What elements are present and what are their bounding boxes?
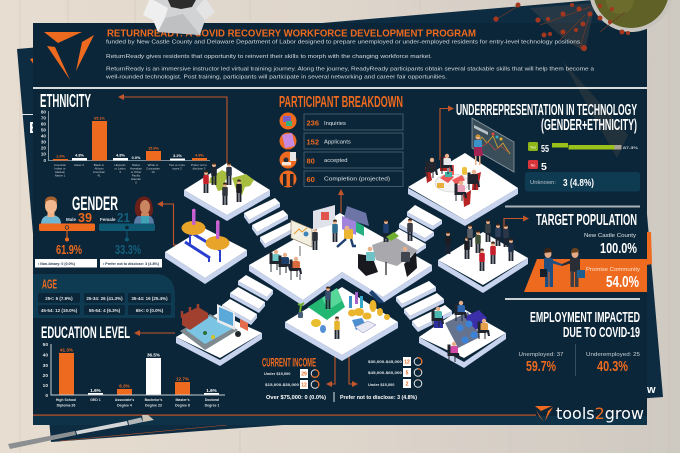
platform: meeting with chart board — [408, 118, 518, 226]
ethnicity bar chart: Hispanic — [114, 163, 126, 167]
underrepresentation stats: 5 — [541, 161, 547, 173]
participant breakdown list: 80 — [306, 156, 315, 166]
intro paragraph — [105, 40, 595, 80]
platform: gender scales — [165, 209, 247, 284]
current income panel: Under $15,000 — [368, 382, 394, 387]
current income panel: 29 — [301, 372, 307, 378]
gender panel — [35, 194, 162, 268]
ethnicity bar chart: 4.8% — [116, 154, 125, 158]
arrow: gender — [157, 201, 182, 245]
ethnicity bar chart: or Other — [131, 170, 141, 174]
gender heading: GENDER — [72, 194, 118, 215]
icon: inquiries — [280, 112, 296, 130]
ethnicity bar chart: disclose 3 — [193, 166, 206, 170]
arrow: ethnicity — [118, 94, 227, 165]
education bar chart: Degree 8 — [175, 404, 190, 408]
ethnicity bar chart: 0 — [43, 158, 46, 163]
current income panel: 12 — [301, 382, 307, 388]
education heading: EDUCATION LEVEL — [41, 324, 130, 342]
employment stats: 40.3% — [597, 358, 628, 375]
decoration: craft knife — [8, 415, 154, 449]
current income panel: Over $75,000: 0 (0.0%) — [266, 395, 326, 401]
current income panel: 5 — [406, 370, 409, 376]
panel: age: 25-34: 26 (41.3%) — [86, 296, 123, 301]
panel: age: 55-64: 4 (6.3%) — [89, 308, 121, 313]
arrow: education — [134, 330, 175, 336]
gender panel: • Prefer not to disclose: 3 (4.8%) — [103, 262, 160, 266]
participant breakdown list — [280, 112, 403, 188]
target population panel: Promise Community — [586, 267, 640, 273]
current income panel: $30,000-$45,000 — [368, 359, 402, 364]
footer logo: tools2grow: tools2grow — [556, 404, 644, 423]
education bar chart: 41.3% — [60, 348, 73, 352]
ethnicity bar chart: 3.2% — [173, 154, 182, 158]
employment stats: Unemployed: 37 — [518, 352, 564, 358]
arrow: income right — [349, 353, 358, 387]
employment stats: 59.7% — [526, 358, 556, 375]
icon: completion — [280, 170, 296, 188]
intro paragraph: ReturnReady is an immersive instructor led virtual training journey. Along the journey, ReadyReady participants obtain several stackable skills that will help them become a — [106, 66, 595, 72]
education bar chart: Diploma 26 — [57, 404, 75, 408]
underrepresentation stats: Yes — [530, 146, 536, 150]
arrow: participant — [338, 189, 344, 213]
participant breakdown heading: PARTICIPANT BREAKDOWN — [279, 94, 403, 111]
panel: age: 45-54: 12 (19.0%) — [41, 308, 78, 313]
decoration: white faceted vase — [143, 0, 215, 35]
target population panel: 100.0% — [600, 240, 637, 257]
education bar chart: 1.6% — [90, 388, 101, 393]
ethnicity bar chart: African — [94, 166, 104, 170]
participant breakdown list: 236 — [306, 118, 319, 128]
education bar chart: Master's — [175, 398, 190, 402]
education bar chart: 30 — [43, 363, 48, 369]
ethnicity bar chart: 4.8% — [75, 154, 84, 158]
education bar chart: Bachelor's — [145, 398, 162, 402]
gender panel: Female — [100, 217, 116, 222]
arrow: target population — [504, 216, 529, 232]
current income panel: $15,000-$30,000 — [265, 382, 299, 387]
audience seats — [270, 250, 302, 280]
panel: age — [33, 274, 175, 318]
underrepresentation stats: 3 (4.8%) — [563, 177, 594, 189]
education bar chart: 12.7% — [176, 376, 189, 382]
ethnicity bar chart: or Latino — [114, 166, 126, 170]
underrepresentation stats: 55 — [541, 143, 549, 155]
ethnicity bar chart: 15.9% — [148, 146, 159, 150]
icon: accepted — [280, 152, 296, 168]
title: RETURNREADY: A COVID RECOVERY WORKFORCE DEVELOPMENT PROGRAM — [107, 28, 476, 40]
platform: education — [176, 304, 262, 366]
platform: central workspace — [249, 205, 432, 306]
ethnicity bar chart: Native — [132, 163, 140, 167]
target population panel: 54.0% — [606, 274, 639, 291]
intro paragraph: funded by New Castle County and Delaware Department of Labor designed to prepare unemployed or under-employed residents for entry-level technology positions. — [106, 40, 582, 46]
ethnicity bar chart: Indian or — [54, 166, 66, 170]
participant breakdown list: Completion (projected) — [324, 176, 390, 182]
current income panel: 12 — [404, 360, 410, 366]
arrow: underrepresentation — [440, 106, 454, 160]
decoration: plant bowl — [589, 0, 673, 32]
education bar chart: 36.5% — [147, 352, 160, 358]
participant breakdown list: 152 — [306, 138, 319, 146]
kneeling figure — [337, 226, 356, 247]
ethnicity bar chart: Caucasian — [146, 166, 160, 170]
icon: handshake businessmen — [540, 248, 585, 287]
ethnicity bar chart: 4.8% — [195, 154, 204, 158]
current income panel: Under $15,000 — [264, 371, 290, 376]
education bar chart: GED 1 — [90, 398, 101, 402]
header logo — [44, 32, 94, 80]
large screens — [313, 205, 335, 230]
employment stats — [518, 344, 640, 376]
education bar chart — [43, 342, 225, 408]
back sheet of poster: w — [646, 384, 656, 396]
ethnicity bar chart: Pacific — [132, 174, 141, 178]
intro paragraph: ReturnReady gives residents that opportunity to reinvent their skills to morph with the changing workforce market. — [106, 54, 432, 60]
decoration: red berry branches — [493, 2, 630, 51]
ethnicity bar chart: Hawaiian — [130, 166, 142, 170]
panel: age: 35-44: 16 (25.4%) — [131, 296, 168, 301]
platform: world map — [184, 162, 270, 221]
target population panel: New Castle County — [584, 233, 636, 239]
ethnicity bar chart: 30 — [41, 140, 46, 144]
participant breakdown list: accepted — [324, 158, 348, 164]
ethnicity bar chart: 40 — [41, 134, 46, 138]
participant breakdown list: 60 — [306, 175, 315, 184]
back sheet of poster: E — [29, 120, 40, 137]
ethnicity bar chart: White or — [148, 163, 158, 167]
participant breakdown list: Inquiries — [324, 121, 346, 127]
ethnicity bar chart: 0 — [135, 180, 137, 184]
underrepresentation stats: 87.3% — [623, 145, 639, 150]
ethnicity bar chart: Two or more — [169, 163, 185, 167]
education bar chart: Associate's — [115, 398, 134, 402]
whiteboard presenter — [291, 220, 318, 256]
education bar chart: 6.3% — [119, 384, 130, 388]
gender panel: 61.9% — [56, 242, 82, 257]
ethnicity bar chart: 3 — [119, 170, 121, 174]
underrepresentation stats: No — [531, 164, 535, 168]
ethnicity bar chart: Prefer not to — [191, 163, 207, 167]
ethnicity bar chart: 80 — [41, 110, 46, 114]
gender panel: 21 — [117, 210, 130, 225]
panel: age: 25<: 5 (7.9%) — [45, 296, 73, 301]
current income panel — [262, 357, 422, 402]
underrepresentation stats — [525, 142, 640, 192]
education bar chart: 20 — [43, 373, 48, 379]
ethnicity bar chart: 70 — [41, 116, 46, 120]
education bar chart: Degree 1 — [205, 404, 219, 408]
gender panel: 39 — [78, 210, 92, 225]
ethnicity bar chart: Alaskan — [55, 170, 66, 174]
current income panel: CURRENT INCOME — [262, 358, 316, 370]
icon: female avatar — [134, 196, 154, 224]
gender panel: • Non-binary: 0 (0.0%) — [38, 262, 76, 266]
panel: age: AGE — [42, 276, 57, 292]
platform: servers — [419, 301, 506, 368]
education bar chart: 40 — [43, 352, 48, 358]
ethnicity bar chart: 50 — [41, 128, 46, 132]
target population panel — [524, 233, 647, 292]
ethnicity bar chart: 20 — [41, 146, 46, 150]
ethnicity bar chart: American — [93, 170, 105, 174]
ethnicity bar chart: 1.6% — [56, 154, 65, 158]
education bar chart: Doctoral — [205, 398, 219, 402]
underrepresentation stats: Unknown: — [530, 180, 556, 186]
ethnicity bar chart: Native 1 — [55, 174, 66, 178]
ethnicity bar chart: 65.1% — [94, 116, 105, 120]
ethnicity bar chart: 41 — [97, 174, 101, 178]
education bar chart: Degree 4 — [117, 404, 132, 408]
icon: male avatar — [41, 196, 61, 224]
ethnicity bar chart: races 2 — [172, 166, 182, 170]
employment heading — [530, 309, 640, 341]
ethnicity bar chart: 10 — [41, 152, 46, 156]
arrow: income left — [326, 353, 335, 387]
ethnicity bar chart: Asian 3 — [74, 163, 84, 167]
education bar chart: 50 — [43, 342, 48, 348]
gender panel: 33.3% — [115, 242, 141, 257]
education bar chart: 1.6% — [206, 388, 217, 393]
platform: finance — [285, 286, 398, 361]
current income panel: 2 — [406, 382, 409, 388]
ethnicity bar chart: Black or — [94, 163, 104, 167]
education bar chart: High School — [56, 398, 76, 402]
ethnicity bar chart: 0.0% — [132, 156, 141, 160]
underrepresentation heading — [456, 102, 637, 134]
ethnicity bar chart: 10 — [151, 170, 155, 174]
ethnicity bar chart: Islander — [131, 177, 141, 181]
panel: age: 65<: 0 (0.0%) — [136, 308, 164, 313]
education bar chart: 0 — [45, 393, 48, 399]
meeting table — [372, 237, 418, 266]
ethnicity bar chart: American — [54, 163, 66, 167]
ethnicity bar chart: 60 — [41, 122, 46, 126]
education bar chart: Degree 23 — [145, 404, 162, 408]
education bar chart: 10 — [43, 383, 48, 389]
platform: target population crowd — [438, 220, 528, 293]
icon: applicants — [280, 132, 296, 150]
intro paragraph: well-rounded technologist. Post training, participants will participate in several networking and career fair opportunities. — [105, 74, 447, 80]
current income panel: Prefer not to disclose: 3 (4.8%) — [340, 395, 417, 401]
employment stats: Underemployed: 25 — [586, 352, 640, 358]
stairs — [222, 198, 452, 332]
gender panel: Male — [66, 217, 77, 222]
participant breakdown list: Applicants — [324, 140, 351, 146]
current income panel: $45,000-$60,000 — [368, 370, 402, 375]
ethnicity bar chart — [41, 110, 210, 184]
ethnicity heading: ETHNICITY — [40, 91, 91, 111]
